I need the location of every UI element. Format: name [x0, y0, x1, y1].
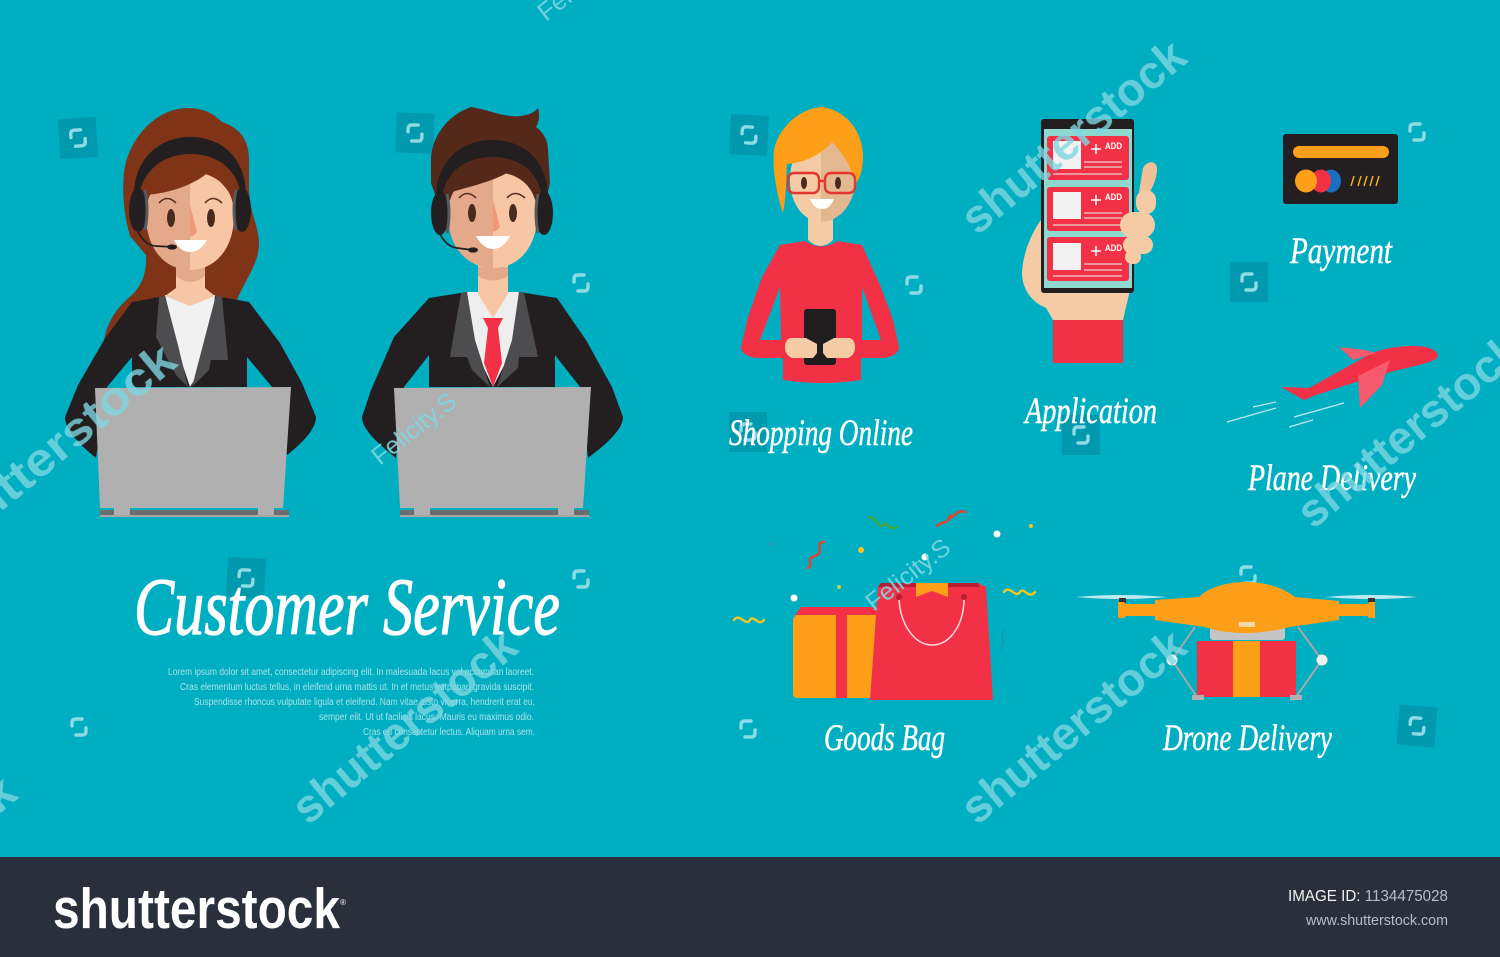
label: plane delivery: Plane Delivery	[1247, 458, 1416, 499]
icon: hand holding smartphone app: ADD	[1105, 243, 1122, 253]
jacket	[362, 292, 623, 458]
diagonal shutterstock watermarks: shutterstock	[281, 618, 527, 834]
microphone	[138, 232, 174, 247]
face	[821, 140, 855, 222]
headband	[134, 137, 246, 196]
icon: gift box and shopping bag	[734, 511, 1035, 700]
jacket	[65, 296, 316, 458]
screen	[1044, 129, 1132, 288]
microphone	[440, 234, 473, 250]
watermark square icons	[58, 112, 1438, 748]
label: application: Application	[1023, 391, 1157, 432]
headset ear pieces	[431, 191, 449, 235]
body text: semper elit. Ut ut facilisis lacus. Mauris eu maximus odio.	[319, 712, 534, 723]
glasses	[788, 173, 855, 193]
neck	[808, 218, 833, 246]
bag handle	[899, 598, 964, 645]
label: payment: Payment	[1289, 231, 1393, 272]
body text: Cras eu consectetur lectus. Aliquam urna sem.	[363, 727, 535, 738]
laptop	[394, 387, 591, 508]
diagonal shutterstock watermarks: shutterstock	[950, 618, 1196, 834]
icon: hand holding smartphone app	[1022, 119, 1157, 363]
body text: Suspendisse rhoncus vulputate ligula et eleifend. Nam vitae justo viverra, hendrerit erat eu,	[194, 697, 535, 708]
shirt	[165, 295, 215, 387]
label: shopping online: Shopping Online	[729, 413, 913, 454]
footer bar	[0, 857, 1500, 957]
hair	[774, 107, 863, 213]
label: drone delivery: Drone Delivery	[1162, 718, 1332, 759]
neck	[478, 258, 508, 318]
drone arms	[1118, 602, 1375, 618]
drone body	[1155, 582, 1339, 633]
icon: airplane with speed lines	[1227, 346, 1438, 427]
icon: delivery drone	[1076, 582, 1418, 700]
tie	[483, 318, 503, 387]
body text: Lorem ipsum dolor sit amet, consectetur adipiscing elit. In malesuada lacus vel accumsan laoreet.	[168, 667, 534, 678]
character: woman agent with laptop	[65, 108, 316, 517]
face	[493, 172, 537, 268]
nose	[190, 205, 197, 236]
grey mount	[1210, 626, 1285, 640]
hair	[104, 108, 259, 340]
card logo circles	[1321, 170, 1341, 192]
lapels	[450, 292, 538, 387]
legs	[1172, 627, 1322, 697]
mouth	[476, 236, 510, 249]
icon: credit card	[1283, 134, 1398, 204]
eyes and brows	[468, 204, 476, 222]
rotors	[1076, 595, 1418, 599]
registered mark: ®	[340, 898, 346, 907]
eyes	[801, 177, 807, 189]
sweater	[741, 241, 899, 383]
shirt	[467, 292, 519, 387]
fringe	[146, 154, 236, 200]
joints and feet	[1166, 654, 1178, 666]
felicity watermarks: Felicity.S	[366, 387, 462, 471]
shopping bag	[870, 583, 993, 700]
icon: hand holding smartphone app: ADD	[1105, 141, 1122, 151]
magnetic stripe	[1293, 146, 1389, 158]
character: man agent with laptop	[362, 107, 623, 517]
body text	[168, 667, 535, 738]
nose	[493, 200, 500, 232]
title: Customer Service	[134, 561, 560, 652]
character: shopping online woman	[741, 107, 899, 383]
app cards	[1047, 136, 1129, 281]
headband	[436, 140, 548, 198]
cuff	[1053, 320, 1123, 363]
fingers	[1120, 162, 1157, 264]
image id: IMAGE ID: 1134475028	[1288, 888, 1448, 905]
eyes and brows	[167, 209, 175, 227]
slashes	[1351, 176, 1379, 186]
headset ear pieces	[129, 188, 147, 232]
felicity watermarks: Felicity.S	[860, 533, 956, 617]
package	[1197, 641, 1296, 697]
speed lines	[1227, 402, 1344, 427]
hands	[785, 338, 855, 358]
fringe	[448, 157, 537, 198]
laptop	[95, 387, 291, 508]
mouth	[810, 199, 834, 209]
palm and thumb	[1022, 220, 1130, 320]
mouth	[174, 240, 207, 252]
confetti	[734, 511, 1035, 650]
felicity watermarks	[366, 0, 956, 617]
sleeve gaps	[760, 287, 881, 340]
icon: hand holding smartphone app: ADD	[1105, 192, 1122, 202]
body text: Cras elementum luctus tellus, in eleifend urna mattis ut. In et metus yutpapan gravida suscipit.	[180, 682, 534, 693]
lapels	[156, 295, 228, 387]
diagonal shutterstock watermarks: shutterstock	[950, 28, 1196, 244]
phone	[804, 309, 836, 365]
footer logo: shutterstock	[53, 877, 340, 941]
label: goods bag: Goods Bag	[824, 718, 945, 759]
bag tag	[916, 583, 948, 597]
gift box	[793, 607, 876, 698]
website: www.shutterstock.com	[1305, 913, 1448, 929]
phone	[1041, 119, 1134, 293]
face	[190, 172, 234, 270]
hair	[431, 107, 550, 200]
neck	[165, 262, 215, 306]
